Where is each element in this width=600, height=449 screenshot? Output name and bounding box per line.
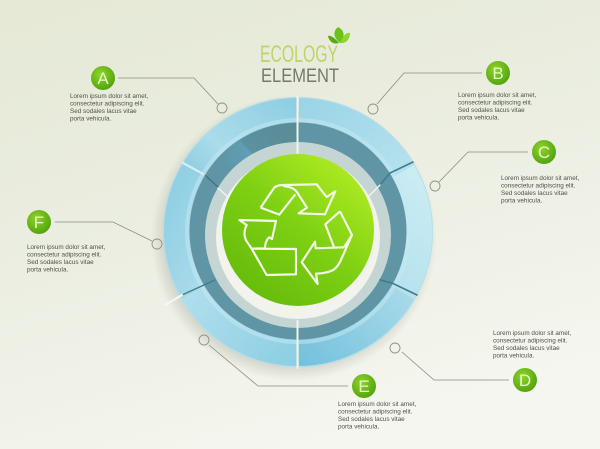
connector E [209, 345, 348, 386]
badge C [532, 140, 556, 164]
text C: consectetur adipiscing elit. [501, 182, 576, 190]
marker D [390, 343, 400, 353]
text E: Sed sodales lacus vitae [338, 416, 405, 423]
icon: recycling arrows [239, 184, 352, 284]
dark inner ring [190, 122, 406, 340]
glass segment E [181, 232, 298, 367]
green centre [222, 154, 374, 306]
marker F [152, 239, 162, 249]
glass segment F [163, 164, 298, 300]
text B: porta vehicula. [458, 114, 499, 122]
marker B [368, 104, 378, 114]
callout F [27, 210, 162, 274]
glass segment B [299, 97, 415, 232]
badge F: F [34, 213, 44, 232]
text D: consectetur adipiscing elit. [493, 338, 568, 344]
text C: Lorem ipsum dolor sit amet, [501, 175, 580, 182]
text C: porta vehicula. [501, 198, 542, 204]
callout A [70, 66, 227, 122]
glass segment C [298, 164, 433, 300]
text D: Sed sodales lacus vitae [493, 345, 560, 352]
text F: consectetur adipiscing elit. [27, 252, 102, 258]
light grey ring [205, 142, 391, 328]
text E: consectetur adipiscing elit. [338, 408, 413, 416]
off-white ring [216, 155, 380, 319]
badge E: E [358, 377, 370, 396]
badge A: A [97, 69, 109, 88]
text E: Lorem ipsum dolor sit amet, [338, 401, 417, 408]
callout C [430, 140, 580, 204]
connector D [402, 352, 509, 380]
glass segment D [298, 232, 415, 367]
circular wheel [163, 96, 433, 368]
drop shadow under wheel [151, 95, 437, 381]
heading: ECOLOGY: ECOLOGY [260, 41, 338, 68]
text B: consectetur adipiscing elit. [458, 100, 533, 106]
badge D [513, 368, 537, 392]
glass segment A [181, 97, 297, 232]
marker A [217, 103, 227, 113]
connector C [439, 152, 528, 182]
text E: porta vehicula. [338, 424, 379, 430]
title: Ecology Element [260, 27, 350, 87]
badge D: D [519, 371, 531, 390]
callout E [199, 335, 417, 430]
text F: porta vehicula. [27, 266, 68, 274]
text B: Lorem ipsum dolor sit amet, [458, 92, 537, 99]
badge B: B [492, 64, 504, 83]
marker C [430, 181, 440, 191]
text A: Sed sodales lacus vitae [70, 108, 137, 115]
text A: consectetur adipiscing elit. [70, 100, 145, 108]
text C: Sed sodales lacus vitae [501, 190, 568, 197]
heading: ELEMENT: ELEMENT [261, 66, 339, 87]
callout B [368, 61, 537, 122]
text D: porta vehicula. [493, 352, 534, 360]
text F: Lorem ipsum dolor sit amet, [27, 244, 106, 251]
callout D [390, 330, 572, 392]
connector F [55, 222, 152, 241]
text A: porta vehicula. [70, 116, 111, 122]
text F: Sed sodales lacus vitae [27, 259, 94, 266]
dividers [165, 96, 417, 368]
badge B [486, 61, 510, 85]
connector B [377, 73, 482, 104]
marker E [199, 335, 209, 345]
text B: Sed sodales lacus vitae [458, 107, 525, 114]
badge E [352, 374, 376, 398]
connector A [118, 78, 218, 104]
badge A [91, 66, 115, 90]
badge C: C [538, 143, 550, 162]
icon: green leaves [328, 27, 350, 44]
text D: Lorem ipsum dolor sit amet, [493, 330, 572, 337]
text A: Lorem ipsum dolor sit amet, [70, 93, 149, 100]
